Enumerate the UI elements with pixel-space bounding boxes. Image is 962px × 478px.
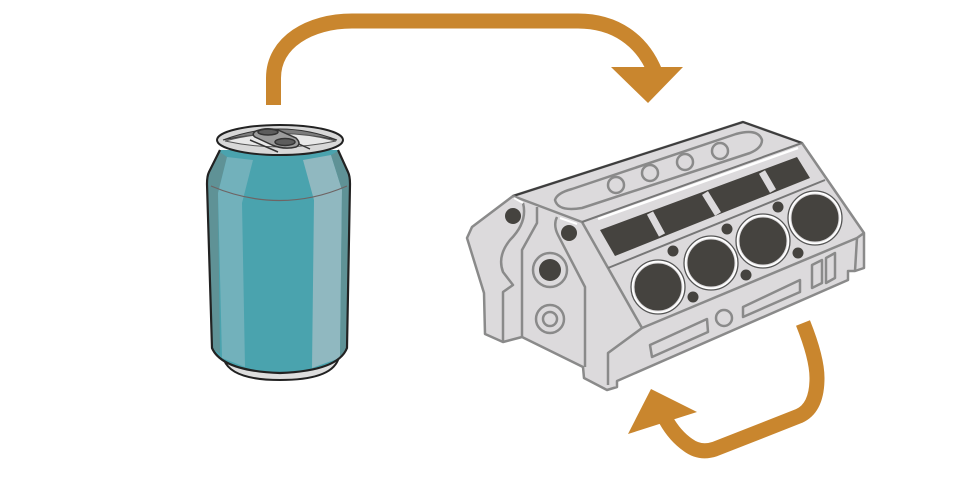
lower slots: [650, 253, 835, 357]
can right shade: [331, 151, 350, 358]
ring pull: [250, 129, 310, 152]
bolt holes: [505, 202, 804, 302]
top edge dark: [513, 122, 802, 196]
can right highlight: [303, 155, 342, 368]
icon: drink can: [207, 125, 350, 380]
block silhouette: [467, 122, 864, 390]
can left shade: [207, 152, 227, 354]
deck edges: [582, 143, 825, 268]
left white highlights: [514, 198, 577, 224]
can left highlight: [218, 157, 253, 367]
can rim: [217, 125, 343, 155]
can lid: [225, 134, 336, 147]
arrow: from can to engine: [274, 21, 683, 105]
left flange lines: [501, 196, 585, 367]
top panel circles: [608, 143, 728, 193]
can lid inner: [223, 129, 337, 140]
icon: engine block: [467, 122, 864, 390]
cylinders: [634, 194, 839, 311]
can body: [207, 150, 350, 373]
side circles: [533, 253, 732, 333]
arrow: from engine looping back: [628, 323, 817, 451]
can shoulder seam: [211, 186, 347, 200]
dark deck slot: [600, 157, 810, 256]
front face edges: [582, 222, 864, 385]
cylinder rings: [631, 191, 842, 314]
slot dividers: [650, 172, 773, 235]
top panel slot: [555, 132, 762, 209]
can outline: [207, 150, 350, 373]
top highlight: [598, 148, 798, 219]
can base: [224, 360, 338, 380]
